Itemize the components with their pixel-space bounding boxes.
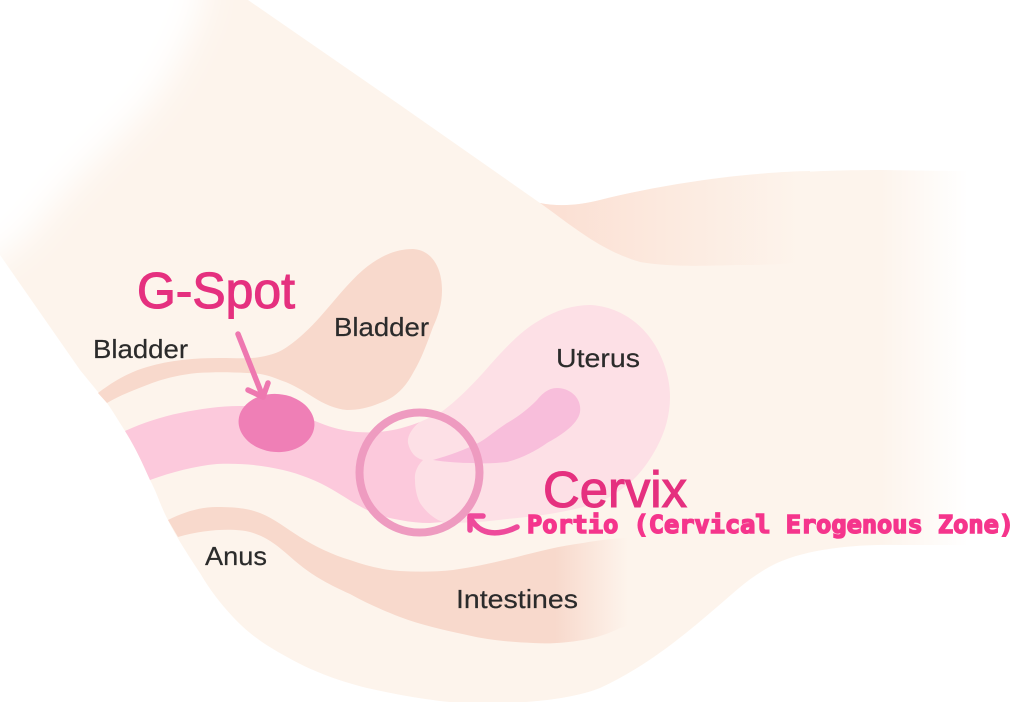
- g-spot marker: [236, 391, 317, 455]
- heading: G-Spot: G-Spot: [137, 262, 295, 319]
- label: Intestines: Intestines: [456, 584, 578, 614]
- label: Bladder right: Bladder: [334, 312, 429, 342]
- organ: vaginal canal: [125, 406, 443, 523]
- organ: uterus: [400, 305, 670, 523]
- organ: intestines and rectum: [168, 507, 635, 643]
- cervix highlight circle: [360, 412, 480, 532]
- label: Uterus: Uterus: [556, 343, 640, 373]
- organ: uterine cavity: [433, 388, 580, 463]
- organ: bladder: [98, 249, 442, 410]
- label: Bladder left: Bladder: [93, 334, 188, 364]
- arrow: to g-spot: [238, 334, 268, 397]
- label: Anus: Anus: [205, 541, 267, 571]
- heading: Cervix: Cervix: [543, 461, 687, 518]
- arrow: to portio: [470, 516, 517, 533]
- label: Portio: Portio (Cervical Erogenous Zone): [527, 510, 1014, 539]
